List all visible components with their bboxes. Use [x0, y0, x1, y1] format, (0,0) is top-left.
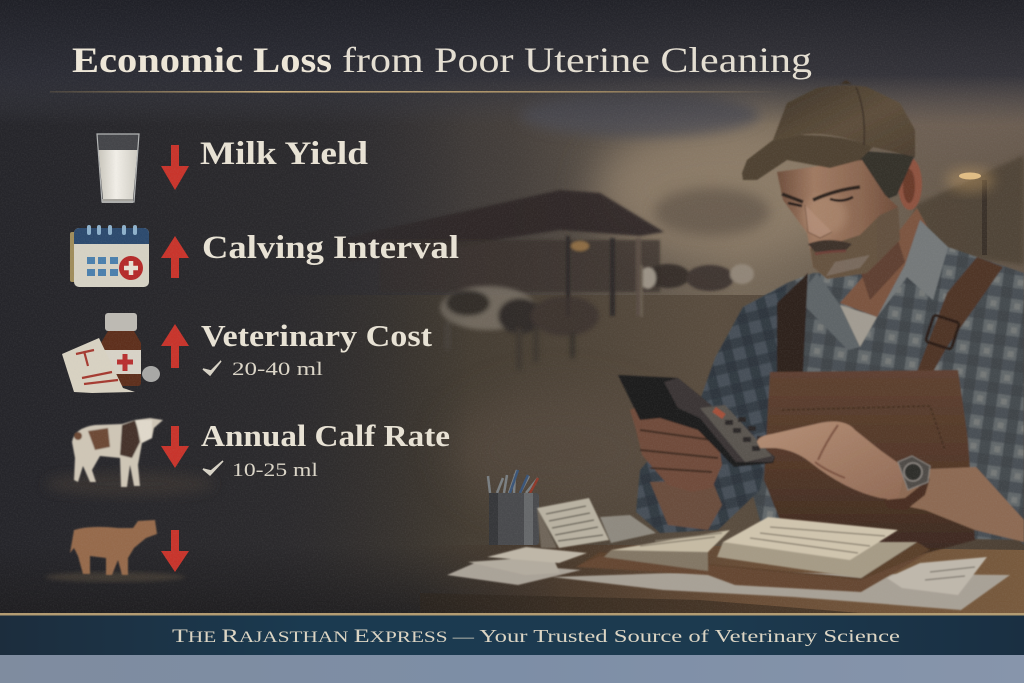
neck [840, 208, 933, 317]
moustache and mouth [808, 240, 852, 252]
detail: dose 20-40 ml: 20-40 ml [232, 359, 323, 380]
nose [805, 205, 832, 238]
icon: calendar with medical cross [70, 225, 149, 287]
label: veterinary cost: Veterinary Cost [201, 318, 433, 353]
wrist watch [884, 456, 930, 510]
left fade [0, 0, 470, 683]
row: calving interval [70, 225, 459, 287]
top band [0, 0, 1024, 125]
arrow down: milk yield [161, 145, 189, 190]
shirt torso [715, 220, 1024, 540]
neck shadow [860, 240, 905, 300]
open ledger book [576, 517, 930, 592]
row: annual calf rate [72, 418, 450, 487]
collar right [877, 220, 948, 317]
undershirt [840, 305, 877, 347]
footer text: T HE R AJASTHAN E XPRESS — Your Trusted Source of Veterinary Science [172, 626, 900, 647]
icon: spotted cow [72, 418, 163, 487]
right sleeve end [976, 467, 1024, 545]
ear [898, 158, 922, 210]
right forearm [885, 467, 1024, 542]
distant right barn and lamp [915, 155, 1024, 265]
apron [764, 370, 975, 560]
face [777, 160, 900, 279]
beard [810, 207, 900, 279]
detail: dose 10-25 ml: 10-25 ml [232, 460, 318, 481]
arrow up: veterinary cost [161, 324, 189, 368]
herd near [440, 286, 599, 370]
ground under left icons [45, 472, 215, 496]
calculator [618, 375, 775, 467]
title [72, 40, 812, 80]
arrow down: calf [161, 530, 189, 572]
detail: dose 20-40 ml [203, 359, 323, 380]
left sleeve [636, 284, 787, 533]
left hand [630, 406, 722, 492]
row: veterinary cost [62, 313, 433, 393]
farmer [618, 80, 1024, 560]
handwritten note [537, 498, 656, 548]
arrow up: calving interval [161, 236, 189, 278]
desk [420, 545, 1024, 613]
barn [335, 190, 664, 316]
icon: medicine bottle and paper [62, 313, 160, 393]
bottom fade [0, 545, 560, 615]
pen cup [488, 470, 539, 545]
icon: milk glass [97, 134, 139, 203]
label: milk yield: Milk Yield [200, 136, 368, 172]
brows [782, 187, 860, 202]
suspender right [917, 257, 1003, 372]
sky glow [595, 120, 855, 260]
left forearm [650, 480, 722, 530]
title: Economic Loss [72, 40, 332, 80]
right hand with pointing finger [757, 422, 905, 500]
bottom strip [0, 655, 1024, 683]
label: annual calf rate: Annual Calf Rate [201, 418, 450, 453]
papers on desk [447, 547, 1010, 610]
collar left [797, 273, 860, 350]
title: from Poor Uterine Cleaning [342, 40, 812, 80]
detail: dose 10-25 ml [203, 460, 318, 481]
icon: brown calf [70, 520, 157, 575]
hair [850, 150, 915, 200]
arrow down: annual calf rate [161, 426, 189, 468]
eyes [788, 197, 853, 206]
suspender left [777, 273, 808, 372]
head [777, 150, 922, 300]
trees [654, 188, 770, 236]
row: milk yield [97, 134, 368, 203]
row: unlabelled calf [70, 520, 189, 575]
ground [0, 295, 1024, 615]
footer band [0, 613, 1024, 655]
cheek light [803, 195, 847, 235]
label: calving interval: Calving Interval [202, 230, 459, 266]
cap [742, 80, 915, 180]
herd far [640, 264, 754, 317]
